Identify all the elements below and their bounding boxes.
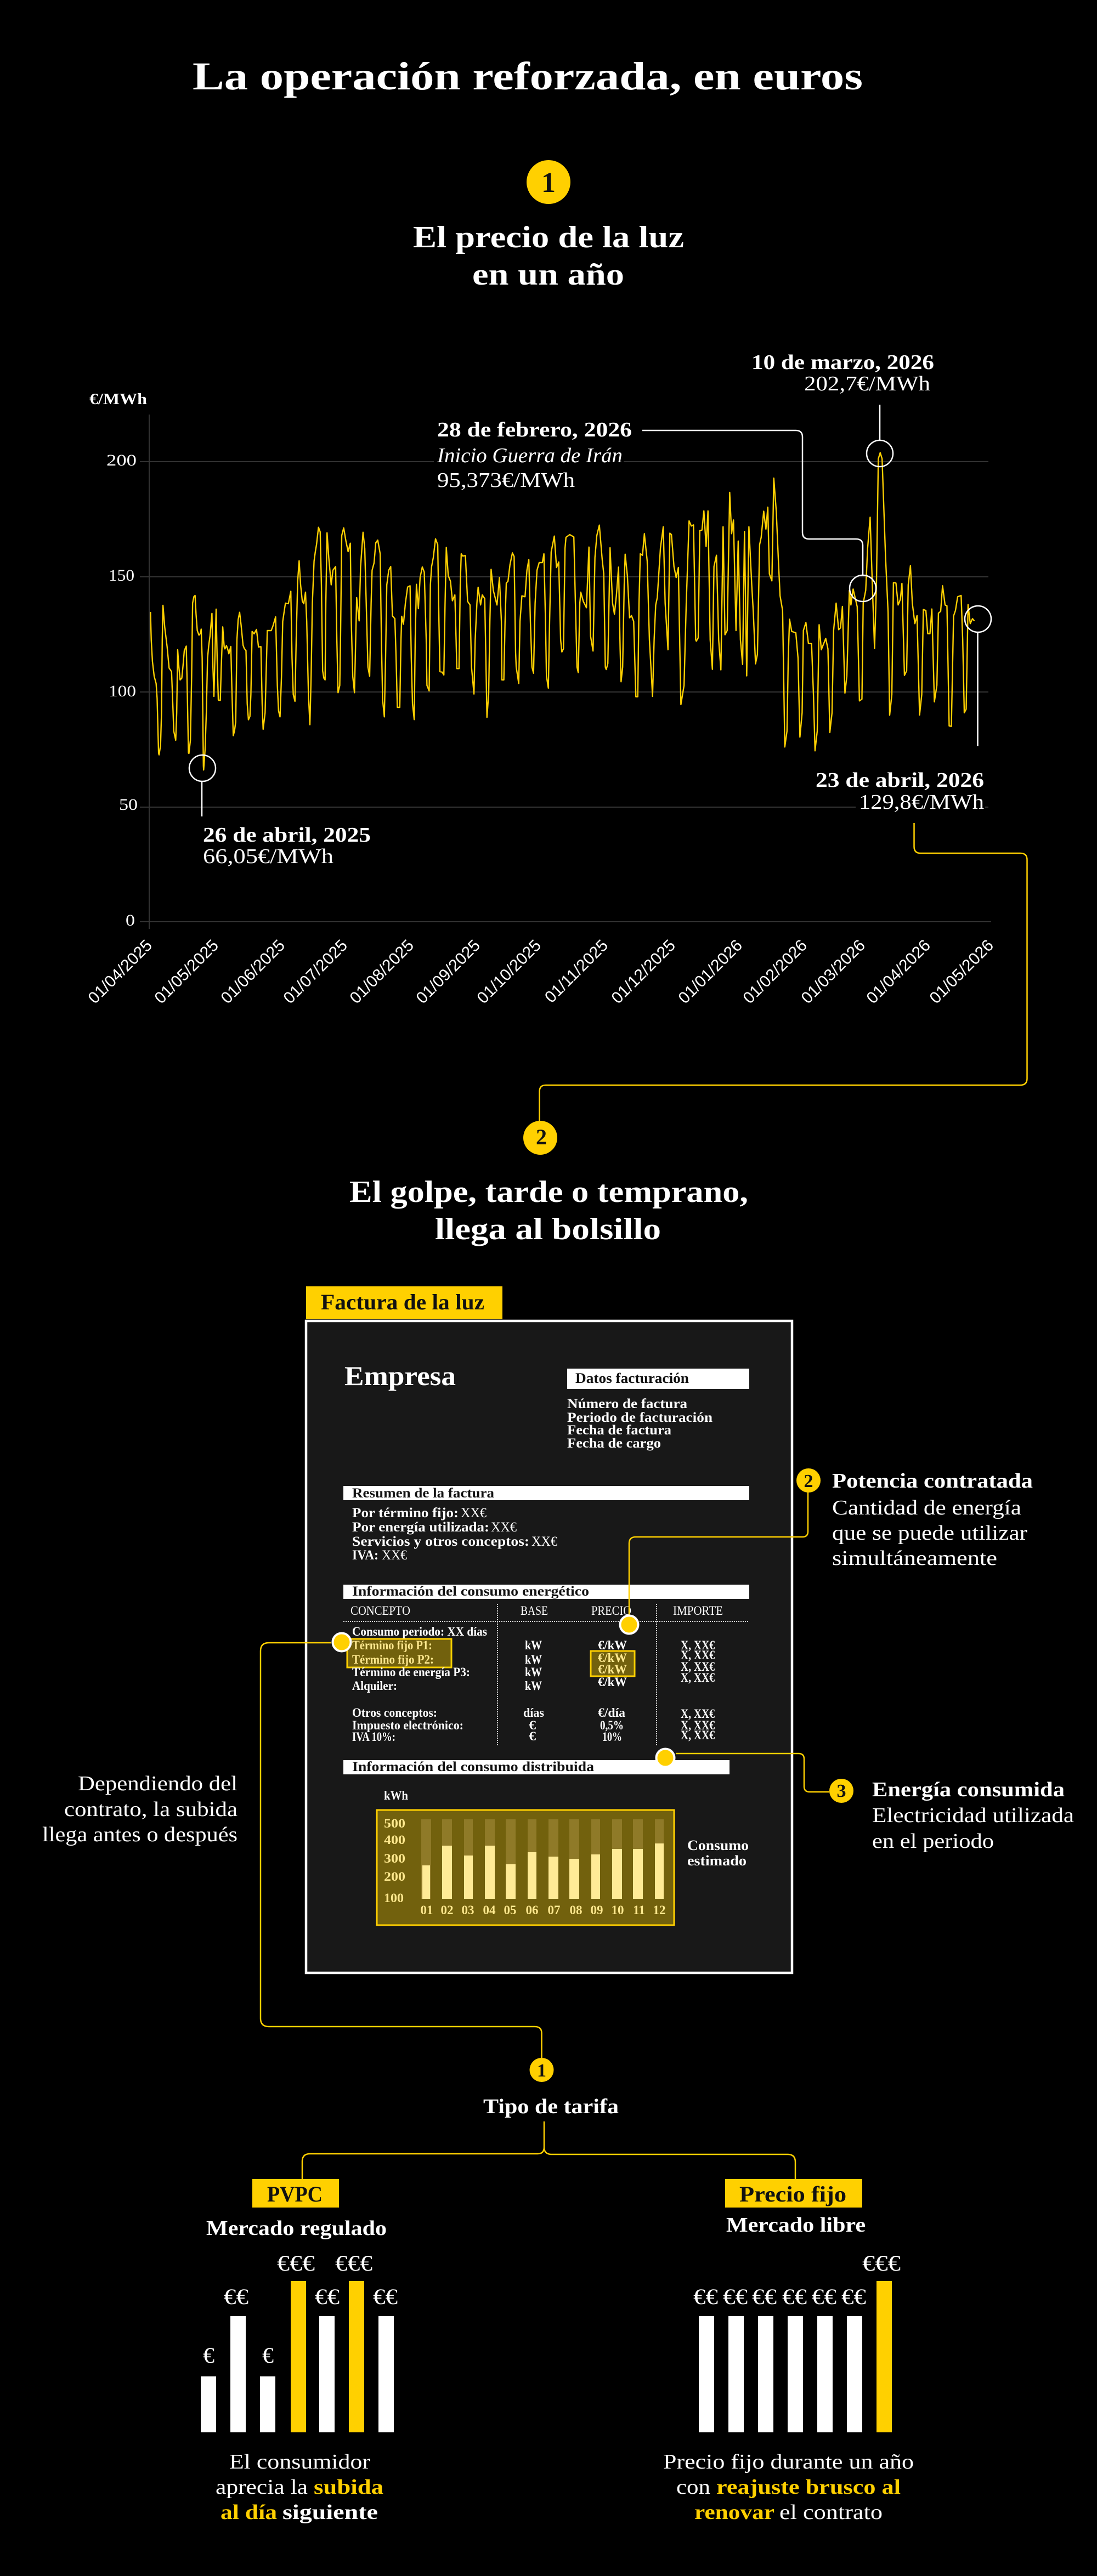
distributed consumption chart: 05	[504, 1903, 517, 1917]
precio fijo description: el contrato	[779, 2501, 883, 2524]
annotation: 10 marzo 2026	[751, 351, 934, 467]
annotation: 28 febrero 2026	[434, 418, 876, 602]
invoice summary: XX€	[491, 1520, 517, 1535]
callout 3: energia consumida: en el periodo	[872, 1830, 994, 1853]
energy consumption table: IMPORTE	[673, 1604, 723, 1618]
energy consumption table: IVA 10%:	[352, 1730, 395, 1744]
x axis labels: 01/01/2026	[675, 937, 746, 1007]
precio fijo description: renovar	[694, 2501, 774, 2524]
invoice summary: Por término fijo:	[352, 1506, 459, 1520]
distributed consumption chart: 04	[483, 1903, 496, 1917]
precio fijo description: con	[676, 2476, 710, 2499]
invoice summary	[343, 1486, 749, 1563]
energy consumption table: PRECIO	[591, 1604, 631, 1618]
callout 3: energia consumida: Electricidad utilizada	[872, 1804, 1074, 1827]
energy consumption table: Término fijo P1:	[352, 1638, 432, 1652]
energy consumption table: Término de energía P3:	[352, 1665, 470, 1679]
precio fijo bars: €€	[841, 2284, 866, 2309]
precio fijo subtitle: Mercado libre	[726, 2214, 866, 2237]
energy consumption table: X, XX€	[681, 1638, 715, 1652]
distributed consumption chart: 07	[547, 1903, 561, 1917]
energy consumption table: €/kW	[598, 1663, 627, 1676]
distributed consumption chart: 200	[384, 1870, 405, 1883]
distributed consumption chart: Información del consumo distribuida	[352, 1760, 595, 1774]
panel: precio fijo	[663, 2179, 914, 2524]
precio fijo bars: €€	[782, 2284, 807, 2309]
annotation: 26 abril 2025: 66,05€/MWh	[203, 845, 333, 868]
invoice summary: IVA:	[352, 1548, 378, 1563]
x axis labels: 01/10/2025	[473, 937, 545, 1007]
annotation: 28 febrero 2026: 28 de febrero, 2026	[437, 418, 632, 441]
distributed consumption chart: 300	[384, 1852, 405, 1865]
heading: tipo de tarifa: Tipo de tarifa	[483, 2095, 619, 2118]
invoice tab	[306, 1286, 502, 1319]
energy consumption table: €/kW	[598, 1638, 627, 1652]
connector: potencia contratada	[629, 1490, 808, 1625]
title: La operación reforzada, en euros	[193, 54, 863, 98]
annotation: 28 febrero 2026: 95,373€/MWh	[437, 469, 575, 492]
billing data: Periodo de facturación	[567, 1410, 713, 1425]
precio fijo tag	[725, 2179, 862, 2208]
billing data	[567, 1369, 749, 1451]
energy consumption table: €	[529, 1718, 536, 1732]
section 2 heading: El golpe, tarde o temprano,	[349, 1175, 748, 1209]
marker dot: potencia	[620, 1615, 638, 1634]
highlight boxes	[347, 1639, 451, 1667]
distributed consumption chart: 01	[420, 1903, 433, 1917]
annotation: 28 febrero 2026: Inicio Guerra de Irán	[437, 444, 623, 467]
annotation: 10 marzo 2026: 10 de marzo, 2026	[751, 351, 934, 374]
y axis labels: 50	[119, 796, 138, 814]
precio fijo bars: €€	[752, 2284, 777, 2309]
panel: PVPC	[201, 2179, 398, 2524]
PVPC bars: €	[262, 2343, 274, 2368]
energy consumption table: €/día	[598, 1706, 626, 1720]
energy consumption table: €	[529, 1729, 536, 1743]
precio fijo bars	[693, 2251, 901, 2432]
invoice summary: Por energía utilizada:	[352, 1520, 489, 1535]
x axis labels: 01/06/2025	[217, 937, 289, 1007]
PVPC description: al día	[220, 2501, 277, 2524]
distributed consumption chart: 11	[633, 1903, 645, 1917]
PVPC bars	[201, 2251, 398, 2432]
section 2 number badge	[523, 1121, 557, 1155]
PVPC bars: €€€	[277, 2251, 315, 2276]
energy consumption table: 10%	[602, 1730, 622, 1744]
invoice summary: XX€	[382, 1548, 407, 1563]
x axis labels: 01/11/2025	[541, 937, 612, 1007]
precio fijo bars: €€	[693, 2284, 718, 2309]
precio fijo bars: €€€	[862, 2251, 901, 2276]
energy consumption table: X, XX€	[681, 1671, 715, 1684]
left note	[42, 1772, 238, 1846]
energy consumption table: X, XX€	[681, 1707, 715, 1721]
PVPC bars: €€	[315, 2284, 340, 2309]
PVPC description: siguiente	[282, 2501, 378, 2524]
distributed consumption chart	[343, 1760, 749, 1925]
invoice summary: XX€	[461, 1506, 487, 1520]
section 1 number badge	[527, 160, 570, 204]
badge 1: tipo de tarifa	[530, 2058, 554, 2082]
invoice tab: Factura de la luz	[321, 1290, 484, 1314]
left note: contrato, la subida	[64, 1798, 238, 1821]
badge 1: tipo de tarifa: 1	[537, 2061, 546, 2081]
x axis labels: 01/04/2026	[863, 937, 934, 1007]
connector: tipo de tarifa	[261, 1643, 542, 2058]
distributed consumption chart: 500	[384, 1817, 405, 1830]
energy consumption table: kW	[525, 1638, 542, 1652]
precio fijo description: Precio fijo durante un año	[663, 2450, 914, 2473]
PVPC description	[216, 2450, 383, 2524]
distributed consumption chart: 400	[384, 1833, 405, 1847]
section 2 number badge: 2	[536, 1125, 547, 1149]
x axis labels: 01/04/2025	[84, 937, 156, 1007]
distributed consumption chart: 09	[590, 1903, 603, 1917]
energy consumption table: X, XX€	[681, 1648, 715, 1662]
invoice summary: Servicios y otros conceptos:	[352, 1534, 529, 1549]
billing data: Datos facturación	[575, 1370, 689, 1386]
PVPC description: aprecia la	[216, 2476, 308, 2499]
connector: energia consumida	[676, 1754, 829, 1792]
energy consumption table: kW	[525, 1665, 542, 1679]
marker dot: energia	[656, 1749, 675, 1767]
distributed consumption chart: 10	[611, 1903, 624, 1917]
energy consumption table	[343, 1584, 749, 1745]
callout 2: potencia contratada	[796, 1468, 1033, 1570]
x axis labels: 01/09/2025	[412, 937, 484, 1007]
y axis labels: 100	[109, 682, 136, 700]
line chart: electricity price	[84, 351, 997, 1007]
callout 2: potencia contratada: que se puede utilizar	[832, 1522, 1027, 1545]
callout 2: potencia contratada: Cantidad de energía	[832, 1496, 1021, 1519]
x axis labels: 01/07/2025	[280, 937, 351, 1007]
distributed consumption chart: kWh	[384, 1789, 408, 1802]
energy consumption table: Término fijo P2:	[352, 1653, 434, 1666]
PVPC description: subida	[314, 2476, 383, 2499]
x axis labels: 01/02/2026	[739, 937, 811, 1007]
callout 2: potencia contratada: Potencia contratada	[832, 1469, 1033, 1493]
billing data: Número de factura	[567, 1397, 688, 1411]
PVPC bars: €€	[373, 2284, 398, 2309]
section 1 heading: en un año	[472, 258, 624, 292]
section 2 heading	[349, 1175, 748, 1246]
distributed consumption chart: 12	[653, 1903, 666, 1917]
distributed consumption chart: 02	[441, 1903, 453, 1917]
precio fijo description: reajuste brusco al	[716, 2476, 901, 2499]
callout 2: potencia contratada: simultáneamente	[832, 1547, 997, 1570]
x axis labels: 01/12/2025	[608, 937, 679, 1007]
distributed consumption chart: 08	[569, 1903, 583, 1917]
precio fijo description	[663, 2450, 914, 2524]
distributed consumption chart: Consumo	[687, 1837, 749, 1853]
callout 2: potencia contratada: 2	[804, 1471, 813, 1491]
billing data: Fecha de factura	[567, 1423, 672, 1438]
distributed consumption chart: 03	[462, 1903, 474, 1917]
billing data: Fecha de cargo	[567, 1436, 661, 1451]
x axis labels: 01/03/2026	[798, 937, 869, 1007]
callout 3: energia consumida	[829, 1778, 1074, 1853]
x axis labels	[84, 937, 997, 1007]
section 1 heading: El precio de la luz	[413, 220, 684, 254]
energy consumption table: €/kW	[598, 1651, 627, 1665]
left note: llega antes o después	[42, 1823, 238, 1846]
x axis labels: 01/05/2026	[926, 937, 997, 1007]
callout 3: energia consumida: 3	[837, 1781, 846, 1801]
PVPC description: El consumidor	[229, 2450, 370, 2473]
left note: Dependiendo del	[78, 1772, 238, 1795]
PVPC bars: €	[203, 2343, 214, 2368]
precio fijo tag: Precio fijo	[739, 2182, 846, 2206]
energy consumption table: X, XX€	[681, 1728, 715, 1742]
y axis labels: 150	[109, 566, 134, 585]
PVPC bars: €€	[224, 2284, 248, 2309]
annotation: 26 abril 2025: 26 de abril, 2025	[203, 824, 371, 847]
energy consumption table: CONCEPTO	[350, 1604, 410, 1618]
annotation: 10 marzo 2026: 202,7€/MWh	[804, 372, 930, 395]
distributed consumption chart: estimado	[687, 1853, 747, 1869]
precio fijo bars: €€	[723, 2284, 748, 2309]
connector: chart to section 2	[540, 823, 1027, 1121]
distributed consumption chart: 100	[384, 1891, 404, 1905]
energy consumption table: X, XX€	[681, 1660, 715, 1673]
y axis labels: 200	[106, 451, 137, 469]
energy consumption table: días	[523, 1706, 544, 1720]
distributed consumption chart: 06	[525, 1903, 539, 1917]
energy consumption table: 0,5%	[600, 1718, 624, 1732]
section 1 number badge: 1	[541, 167, 556, 198]
invoice summary: XX€	[531, 1534, 557, 1549]
marker dot: tipo de tarifa	[332, 1633, 351, 1652]
company name: Empresa	[344, 1360, 456, 1391]
y axis labels: 0	[126, 911, 135, 929]
annotation: 23 abril 2026: 129,8€/MWh	[859, 791, 984, 814]
invoice summary: Resumen de la factura	[352, 1486, 495, 1501]
y axis unit: €/MWh	[89, 391, 147, 408]
x axis labels: 01/05/2025	[151, 937, 222, 1007]
section 1 heading	[413, 220, 684, 292]
y axis labels	[106, 451, 138, 929]
PVPC tag: PVPC	[267, 2182, 323, 2206]
price line	[150, 453, 974, 770]
section 2 heading: llega al bolsillo	[435, 1212, 661, 1246]
annotation: 26 abril 2025	[189, 755, 371, 868]
PVPC subtitle: Mercado regulado	[206, 2217, 387, 2240]
energy consumption table: Otros conceptos:	[352, 1706, 437, 1720]
energy consumption table: X, XX€	[681, 1718, 715, 1732]
energy consumption table: BASE	[521, 1604, 548, 1618]
energy consumption table: kW	[525, 1679, 542, 1693]
PVPC tag	[252, 2179, 339, 2208]
energy consumption table: Consumo periodo: XX días	[352, 1625, 487, 1638]
energy consumption table: €/kW	[598, 1675, 627, 1689]
PVPC bars: €€€	[335, 2251, 372, 2276]
x axis labels: 01/08/2025	[346, 937, 417, 1007]
energy consumption table: kW	[525, 1653, 542, 1666]
tariff branch connector	[302, 2121, 795, 2179]
energy consumption table: Alquiler:	[352, 1679, 397, 1693]
annotation: 23 abril 2026	[816, 606, 991, 814]
grid and axes	[140, 415, 991, 929]
callout 3: energia consumida: Energía consumida	[872, 1778, 1065, 1801]
invoice card	[306, 1321, 792, 1973]
precio fijo bars: €€	[812, 2284, 836, 2309]
annotation: 23 abril 2026: 23 de abril, 2026	[816, 769, 984, 792]
energy consumption table: Información del consumo energético	[352, 1584, 589, 1599]
energy consumption table: Impuesto electrónico:	[352, 1718, 463, 1732]
